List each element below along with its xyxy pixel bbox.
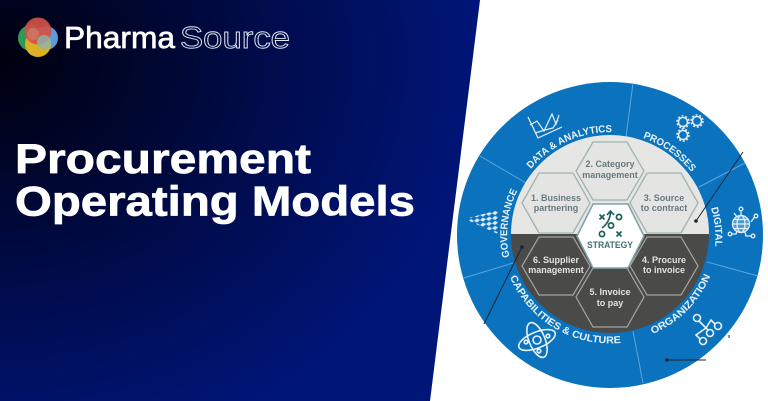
hexagon: 5. Invoice to pay: 5. Invoice <box>589 287 631 297</box>
icon: atom <box>516 320 558 360</box>
wordmark: Pharma <box>64 20 176 55</box>
title <box>15 135 415 224</box>
hexagon: Strategy <box>577 204 644 268</box>
label: Processes: PROCESSES <box>644 132 696 171</box>
hexagon: 1. Business partnering: partnering <box>534 203 578 213</box>
hexagon: 2. Category management <box>576 142 644 200</box>
hexagon: 3. Source to contract <box>630 173 698 233</box>
hexagon: 4. Procure to invoice: 4. Procure <box>642 255 686 265</box>
icon: digital globe <box>728 207 758 238</box>
label: Data & Analytics: DATA & ANALYTICS <box>526 125 612 168</box>
hexagon: 3. Source to contract: to contract <box>641 203 687 213</box>
inner light half <box>511 135 709 234</box>
hexagon: 4. Procure to invoice: to invoice <box>643 265 685 275</box>
stray annotation lines <box>484 152 743 361</box>
label: Digital: DIGITAL <box>711 206 722 246</box>
logo: PharmaSource <box>18 18 290 57</box>
title: Procurement <box>15 135 311 182</box>
hexagon: 6. Supplier management <box>522 237 590 295</box>
label: Capabilities & Culture: CAPABILITIES & CULTURE <box>511 276 621 344</box>
inner dark half <box>511 234 709 333</box>
hexagon: 5. Invoice to pay <box>576 268 644 327</box>
hexagon: 1. Business partnering: 1. Business <box>531 193 581 203</box>
hexagon: 6. Supplier management: management <box>528 265 584 275</box>
hexagon: 2. Category management: management <box>582 170 638 180</box>
icon: organization tree <box>694 314 722 344</box>
hexagon: Strategy: STRATEGY <box>587 240 634 251</box>
icon: strategy play <box>599 211 622 237</box>
icon: analytics chart <box>528 114 562 138</box>
label: Governance: GOVERNANCE <box>500 188 518 258</box>
panel: navy background <box>0 0 480 401</box>
hexagon: 5. Invoice to pay: to pay <box>597 298 623 308</box>
hexagon: 4. Procure to invoice <box>630 237 698 295</box>
label: Organization: ORGANIZATION <box>651 274 710 333</box>
hexagon: 2. Category management: 2. Category <box>585 159 635 169</box>
ring dividers <box>464 83 758 383</box>
hexagon: 6. Supplier management: 6. Supplier <box>533 255 580 265</box>
hexagon: 3. Source to contract: 3. Source <box>644 193 684 203</box>
outer blue ring <box>457 82 763 388</box>
logo: PharmaSource: Source <box>180 20 290 55</box>
hexagon: 1. Business partnering <box>522 173 590 233</box>
icon: governance pyramid <box>465 210 498 234</box>
title: Operating Models <box>15 178 415 224</box>
icon: gears <box>677 115 703 141</box>
chart: procurement operating model wheel <box>457 82 763 388</box>
icon: overlapping coloured circles <box>18 18 58 57</box>
ring labels <box>500 125 722 344</box>
